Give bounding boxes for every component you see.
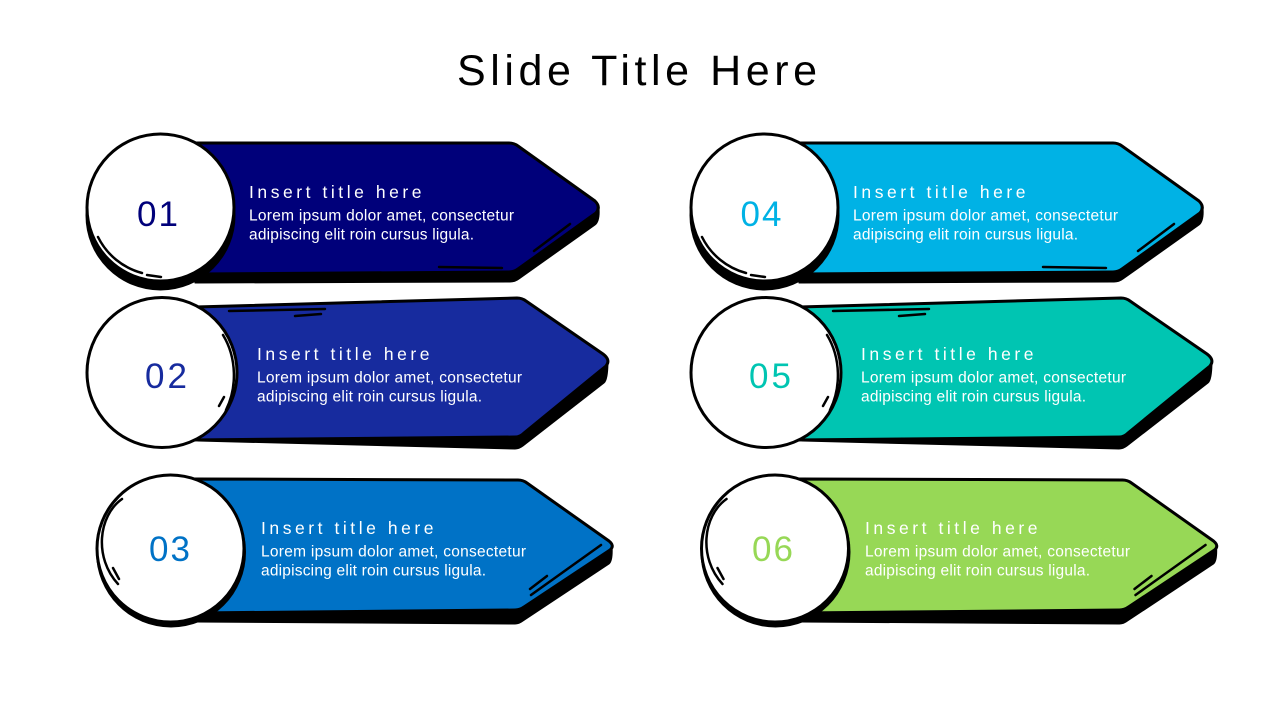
- circle badge 03: [96, 475, 246, 628]
- arrow shape 04: [799, 143, 1203, 283]
- text block 01: Lorem ipsum dolor amet, consectetur: [249, 208, 514, 224]
- text block 03: adipiscing elit roin cursus ligula.: [261, 562, 486, 580]
- panel: item 04: [690, 134, 1203, 290]
- title: Slide Title Here: [457, 47, 817, 95]
- text block 04: [853, 182, 1118, 244]
- circle badge 02: [87, 298, 237, 448]
- text block 06: Lorem ipsum dolor amet, consectetur: [865, 544, 1130, 560]
- number 01: 01: [137, 195, 178, 234]
- text block 02: Insert title here: [257, 344, 430, 364]
- text block 06: [865, 518, 1130, 580]
- text block 05: Lorem ipsum dolor amet, consectetur: [861, 370, 1126, 386]
- text block 05: adipiscing elit roin cursus ligula.: [861, 388, 1086, 406]
- text block 03: Insert title here: [261, 518, 434, 538]
- arrow shape 01: [195, 143, 599, 283]
- text block 06: Insert title here: [865, 518, 1038, 538]
- text block 01: [249, 182, 514, 244]
- panel: item 01: [86, 134, 599, 290]
- arrow shape 02: [190, 298, 608, 449]
- circle badge 05: [691, 298, 841, 448]
- panel: item 02: [87, 298, 608, 449]
- text block 06: adipiscing elit roin cursus ligula.: [865, 562, 1090, 580]
- arrow shape 06: [800, 479, 1217, 624]
- number 05: 05: [749, 357, 791, 396]
- circle badge 06: [700, 475, 850, 628]
- text block 02: adipiscing elit roin cursus ligula.: [257, 388, 482, 406]
- text block 04: Lorem ipsum dolor amet, consectetur: [853, 208, 1118, 224]
- text block 05: [861, 344, 1126, 406]
- text block 01: Insert title here: [249, 182, 422, 202]
- circle badge 01: [86, 134, 236, 290]
- text block 02: [257, 344, 522, 406]
- circle badge 04: [690, 134, 840, 290]
- number 04: 04: [740, 195, 782, 234]
- text block 04: Insert title here: [853, 182, 1026, 202]
- arrow shape 05: [794, 298, 1212, 449]
- number 03: 03: [149, 530, 190, 569]
- number 02: 02: [145, 357, 187, 396]
- text block 04: adipiscing elit roin cursus ligula.: [853, 226, 1078, 244]
- text block 02: Lorem ipsum dolor amet, consectetur: [257, 370, 522, 386]
- text block 05: Insert title here: [861, 344, 1034, 364]
- panel: item 03: [96, 475, 612, 628]
- panel: item 06: [700, 475, 1217, 628]
- text block 01: adipiscing elit roin cursus ligula.: [249, 226, 474, 244]
- text block 03: [261, 518, 526, 580]
- text block 03: Lorem ipsum dolor amet, consectetur: [261, 544, 526, 560]
- arrow shape 03: [195, 479, 612, 624]
- panel: item 05: [691, 298, 1212, 449]
- number 06: 06: [752, 530, 793, 569]
